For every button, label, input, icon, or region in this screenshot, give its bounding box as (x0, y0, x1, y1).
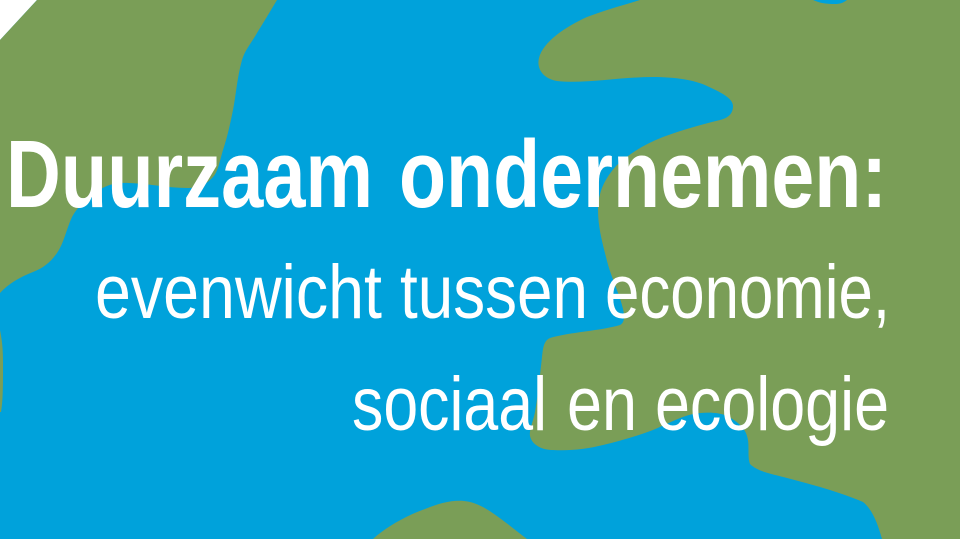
land: bottom (373, 501, 527, 539)
land: top left (0, 0, 277, 293)
subtitle line 2: sociaal (352, 362, 547, 447)
subtitle line 1: economie, (605, 250, 890, 335)
subtitle line 1: tussen (400, 250, 588, 335)
land: right (530, 0, 960, 539)
subtitle line 1: evenwicht (95, 250, 382, 335)
land: left edge (0, 330, 3, 412)
subtitle line 2: ecologie (655, 362, 889, 447)
title: Duurzaam (6, 121, 373, 228)
subtitle line 2: en (567, 362, 637, 447)
white corner (0, 0, 37, 40)
